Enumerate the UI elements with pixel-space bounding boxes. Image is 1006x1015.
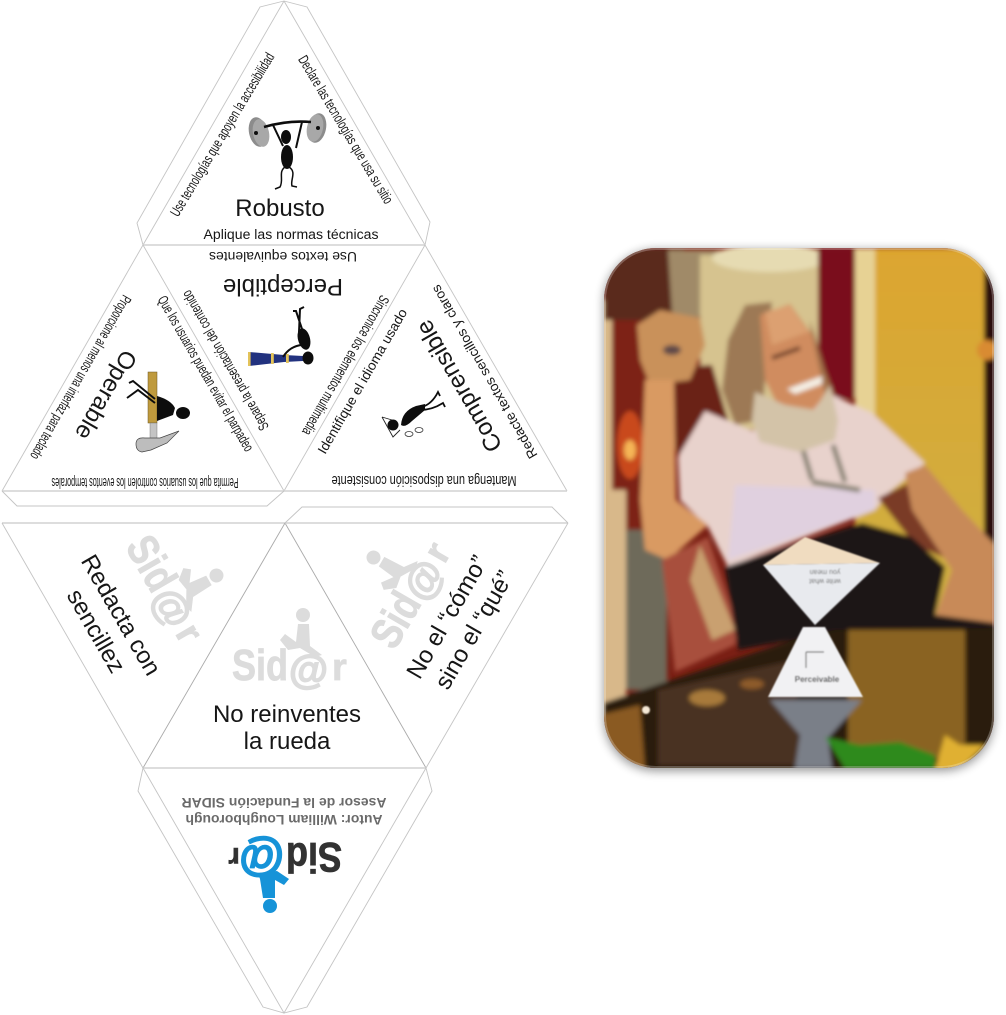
panel: left triangle Operable: [2, 245, 284, 506]
text: No reinventes la rueda: No reinventes: [213, 701, 361, 728]
logo: grey Sidar rotated left: Sid: [361, 584, 431, 656]
text: Identifique el idioma: Identifique el idioma usado: [315, 306, 410, 456]
text: Redacta con sencillez: Redacta con: [75, 550, 166, 680]
icon: paper pyramid in photo: Perceivable: [795, 675, 840, 684]
heading: Perceptible: Perceptible: [223, 273, 343, 300]
panel: right triangle Comprensible: [284, 245, 567, 491]
text: Mantenga: Mantenga una disposición consistente: [332, 472, 516, 488]
text: author credit: Asesor de la Fundación SIDAR: [181, 795, 386, 810]
logo: Sidar colour: Sid: [286, 834, 342, 881]
icon: paper pyramid in photo: write what: [809, 577, 842, 584]
fold lines of the No el cómo face: [285, 507, 568, 768]
logo: grey Sidar centered: Sid: [232, 641, 288, 690]
panel: top triangle Robusto: [137, 1, 430, 245]
logo: grey Sidar rotated right: Sid: [116, 527, 186, 600]
logo: grey Sidar centered: [232, 608, 347, 692]
logo: Sidar colour: [228, 834, 342, 913]
icon: weightlifter: [246, 111, 329, 189]
fold lines of the Perceptible face: [143, 245, 425, 491]
fold lines of the Comprensible face: [284, 245, 567, 491]
text: Redacte textos: Redacte textos sencillos y claros: [428, 282, 540, 461]
text: Separe la presentación: Separe la presentación del contenido: [179, 287, 273, 433]
photo shadow: [604, 250, 994, 771]
panel: center triangle Perceptible: [143, 245, 425, 491]
logo: grey Sidar rotated right: r: [167, 617, 211, 651]
logo: grey Sidar centered: r: [332, 647, 347, 689]
logo: grey Sidar rotated left: [332, 516, 462, 657]
photo bevel edge: [605, 249, 993, 767]
text: Aplique las normas técnicas: Aplique las normas técnicas: [204, 227, 379, 242]
icon: figure with book: [382, 392, 445, 437]
logo: Sidar colour: r: [228, 841, 240, 874]
logo: grey Sidar rotated right: @: [143, 580, 200, 636]
text: Que los usuarios: Que los usuarios puedan evitar el parpadeo: [154, 293, 256, 455]
text: Use textos equivalentes: Use textos equivalentes: [209, 249, 357, 264]
panel: lower right triangle No el cómo: [285, 507, 568, 768]
text: No reinventes la rueda: [213, 701, 361, 755]
icon: paper pyramid in photo: [763, 537, 880, 697]
fold lines of the Redacta face: [2, 523, 285, 768]
panel: lower left triangle Redacta: [2, 511, 285, 768]
logo: grey Sidar rotated left: r: [416, 535, 460, 569]
fold lines of the Robusto face: [137, 1, 430, 245]
panel: lower center triangle No reinventes: [143, 523, 426, 768]
text: Sincronice los elementos: Sincronice los elementos multimedia: [298, 292, 392, 438]
text: No el cómo sino el qué: No el “cómo”: [401, 551, 493, 683]
fold lines of the Operable face: [2, 245, 284, 506]
text: No reinventes la rueda: la rueda: [244, 728, 331, 755]
text: Declare las tecnologías: Declare las tecnologías que usa su sitio: [294, 53, 396, 207]
fold lines of the No reinventes face: [143, 523, 426, 768]
text: author credit: [181, 795, 386, 827]
icon: figure with horn: [248, 307, 314, 366]
logo: grey Sidar centered: @: [289, 648, 328, 692]
text: No el cómo sino el qué: sino el “qué”: [430, 566, 519, 694]
text: Redacta con sencillez: sencillez: [61, 585, 130, 678]
icon: paper pyramid in photo: you mean: [810, 568, 840, 575]
heading: Operable: Operable: [69, 345, 142, 444]
panel: bottom triangle author: [138, 768, 432, 1013]
logo: grey Sidar rotated left: @: [395, 552, 453, 608]
logo: Sidar colour: @: [239, 834, 284, 886]
logo: grey Sidar rotated right: [114, 511, 245, 652]
photo: William Loughborough with paper pyramid: [598, 244, 998, 775]
photo scene: [598, 244, 998, 775]
heading: Comprensible: Comprensible: [411, 315, 508, 457]
icon: figure with hammer: [127, 372, 190, 452]
text: author credit: Autor: William Loughborough: [186, 812, 382, 827]
heading: Robusto: Robusto: [235, 195, 325, 222]
fold lines of the author face: [138, 768, 432, 1013]
